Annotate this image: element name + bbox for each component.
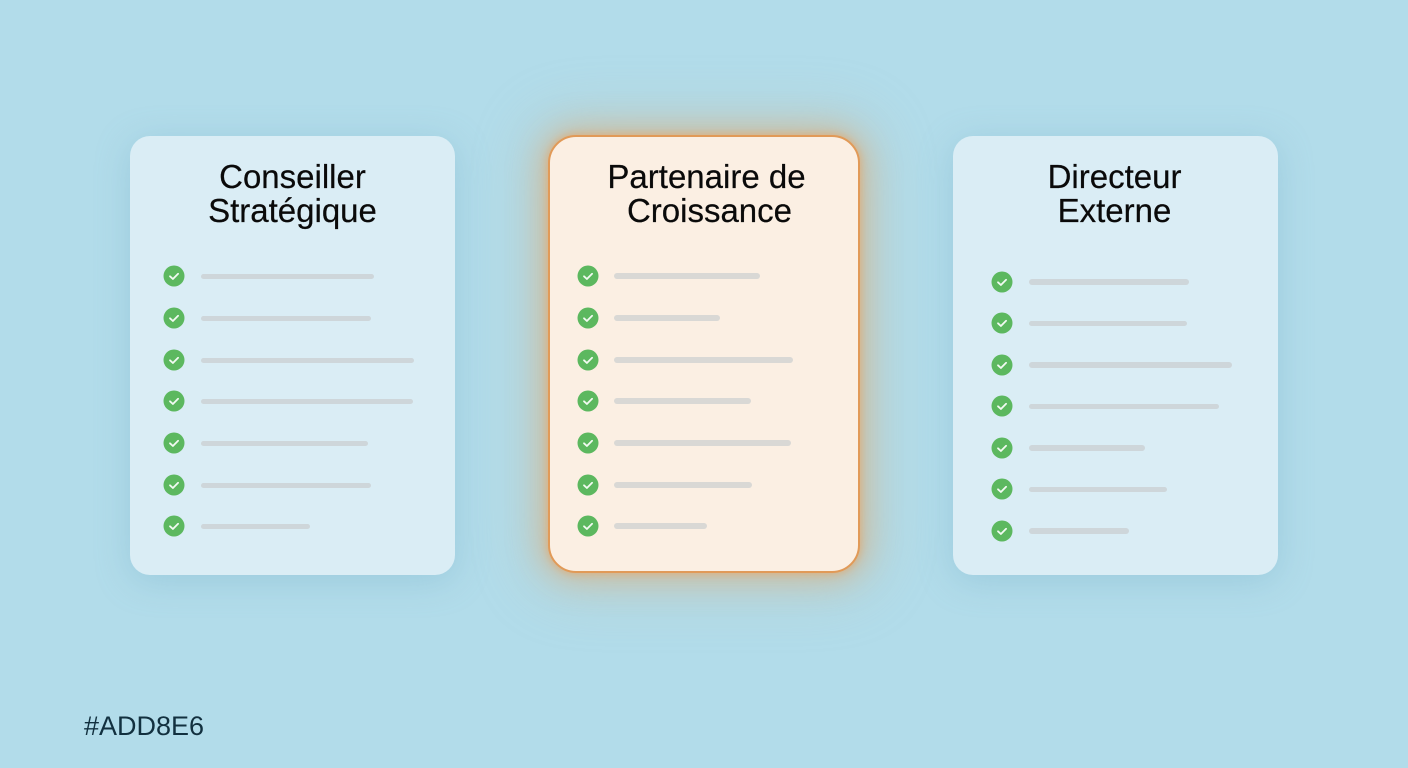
- item 1: [578, 266, 760, 286]
- item 4: [992, 396, 1219, 416]
- item 3: [164, 350, 414, 370]
- item 3: [578, 350, 793, 370]
- heading: Partenaire de Croissance: [607, 158, 806, 228]
- heading: Partenaire de Croissance: Croissance: [627, 192, 792, 228]
- colour code label: #ADD8E6: [84, 711, 204, 741]
- item 2: [164, 308, 371, 328]
- item 1: [164, 266, 374, 286]
- item 5: [164, 432, 368, 454]
- heading: Directeur Externe: Externe: [1058, 192, 1171, 229]
- item 1: [992, 272, 1189, 292]
- heading: Conseiller Stratégique: Conseiller: [219, 158, 366, 195]
- checklist: Conseiller Stratégique: [164, 266, 414, 536]
- item 6: [164, 474, 371, 496]
- item 7: [578, 516, 707, 536]
- item 3: [992, 354, 1232, 376]
- item 4: [578, 390, 751, 412]
- item 4: [164, 390, 413, 412]
- item 6: [578, 474, 752, 496]
- panel: Directeur Externe: [953, 136, 1278, 575]
- heading: Conseiller Stratégique: [208, 158, 377, 230]
- item 5: [992, 438, 1145, 458]
- heading: Directeur Externe: Directeur: [1048, 158, 1181, 195]
- item 7: [164, 516, 310, 536]
- heading: Directeur Externe: [1048, 158, 1182, 229]
- checklist: Partenaire de Croissance: [578, 266, 793, 536]
- item 2: [992, 312, 1187, 334]
- item 6: [992, 478, 1167, 500]
- item 7: [992, 520, 1129, 542]
- heading: Conseiller Stratégique: Stratégique: [208, 192, 377, 229]
- checklist: Directeur Externe: [992, 272, 1232, 542]
- item 5: [578, 432, 791, 454]
- item 2: [578, 308, 720, 328]
- panel: Partenaire de Croissance (highlighted): [548, 135, 860, 573]
- heading: Partenaire de Croissance: Partenaire de: [607, 158, 806, 194]
- panel: Conseiller Stratégique: [130, 136, 455, 575]
